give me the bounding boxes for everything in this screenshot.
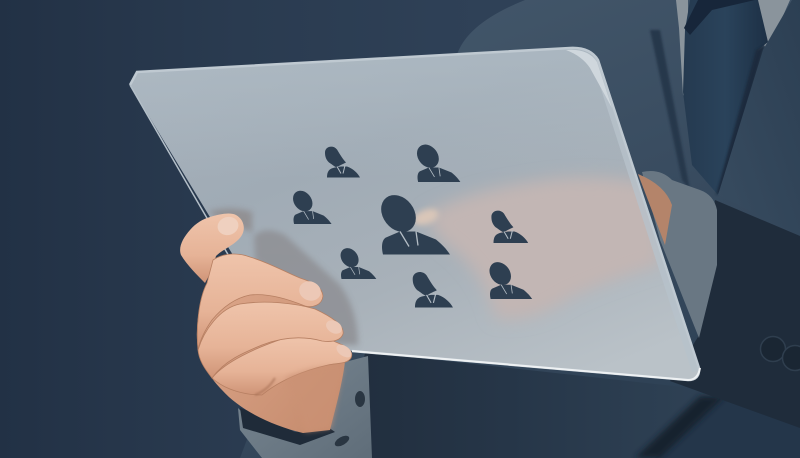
left sleeve (238, 356, 372, 458)
right glass band (592, 56, 666, 278)
lower fold shadow (655, 398, 800, 458)
sleeve button 2 (782, 346, 800, 370)
palm (197, 262, 345, 433)
index finger (197, 254, 323, 350)
dark inner cuff (240, 408, 335, 445)
wrist skin (638, 174, 672, 245)
right forearm sleeve (638, 171, 800, 428)
fingertip glow (414, 206, 440, 228)
tie knot shadow (684, 0, 755, 35)
transparent tablet (130, 40, 702, 380)
dark knit sleeve (670, 200, 800, 428)
glass rim (130, 48, 699, 380)
top light (282, 50, 597, 86)
right jacket front (718, 0, 800, 236)
neck tie (683, 0, 768, 195)
icon: bottom woman (413, 272, 453, 308)
finger crease (255, 378, 275, 395)
blurred thumb shadow (208, 208, 252, 232)
top-right rim bevel (566, 50, 612, 108)
lapel dark seam (650, 30, 690, 190)
white shirt left (676, 0, 688, 100)
blurred finger shadow (254, 230, 358, 345)
icon: central man (374, 188, 450, 254)
tie edge shadow (716, 45, 765, 195)
blurred finger behind the glass (425, 177, 660, 319)
jacket body (240, 0, 800, 458)
ring finger (212, 337, 352, 395)
grey shirt cuff (642, 171, 717, 338)
icon: lower man (337, 245, 376, 279)
left grey cuff (238, 356, 372, 458)
middle fingernail (324, 318, 344, 336)
glass panel (130, 48, 699, 380)
icon: left man (289, 187, 332, 224)
cuff button lower (333, 434, 351, 448)
dark fold (635, 396, 725, 458)
suit lower panel (350, 352, 800, 458)
cuff button upper (355, 391, 365, 407)
bottom white lip (352, 351, 700, 380)
sleeve button 1 (760, 336, 786, 362)
icon: top-right man (412, 140, 460, 182)
people network icons (289, 140, 532, 308)
middle finger (198, 302, 343, 378)
white shirt right (755, 0, 790, 50)
lower palm shade (285, 367, 343, 432)
left edge (130, 85, 252, 296)
ring fingernail (334, 342, 354, 360)
index fingernail (296, 278, 324, 304)
frosted glass contents (130, 40, 702, 372)
business suit jacket (240, 0, 800, 458)
icon: right woman (491, 211, 528, 243)
thumbnail (216, 215, 240, 237)
icon: top-left woman (325, 147, 360, 178)
hand holding the tablet (180, 214, 354, 433)
icon: bottom-right man (485, 258, 532, 299)
thumb (180, 214, 244, 283)
